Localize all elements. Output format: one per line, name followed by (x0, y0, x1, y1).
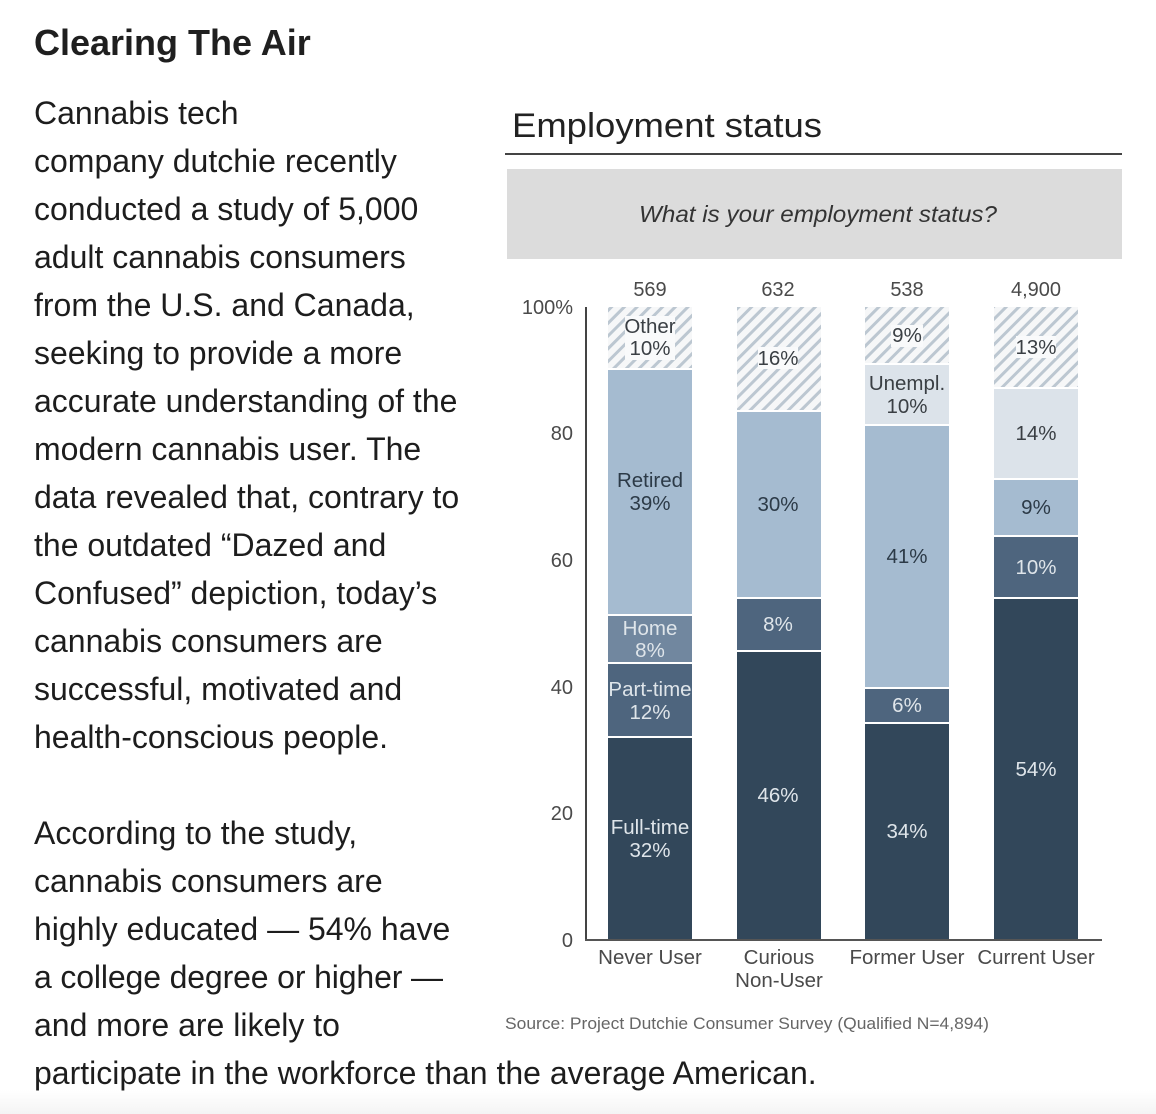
text block: study introduction: modern cannabis user. The (34, 431, 421, 467)
text block: study introduction: conducted a study of 5,000 (34, 191, 418, 227)
bar: Former User: 10% (886, 395, 928, 418)
bar: Current User (994, 279, 1078, 939)
y axis: 60 (551, 550, 573, 572)
bar: Curious Non-User (737, 279, 821, 939)
x axis: Never User (598, 946, 702, 969)
text block: study introduction: company dutchie recently (34, 143, 397, 179)
text block: study introduction: the outdated “Dazed and (34, 527, 386, 563)
text block: study findings: and more are likely to (34, 1007, 340, 1043)
y axis: 80 (551, 423, 573, 445)
text block: study introduction: Cannabis tech (34, 95, 239, 131)
bar: Never User: Full-time (611, 816, 689, 839)
text block: study introduction: Confused” depiction, today’s (34, 575, 437, 611)
bar: Never User: 10% (629, 337, 671, 360)
bar: Curious Non-User: 632 (761, 279, 795, 301)
x axis: Curious (744, 946, 814, 969)
bar: Never User: 569 (633, 279, 667, 301)
bar: Never User: 12% (629, 701, 671, 724)
text block: study introduction: seeking to provide a more (34, 335, 402, 371)
y axis: 100% (522, 297, 573, 319)
bar: Never User: Retired (617, 469, 683, 492)
chart heading: Employment status (512, 107, 822, 145)
text block: study introduction: data revealed that, contrary to (34, 479, 459, 515)
bar: Former User (865, 279, 949, 939)
bar: Current User: 9% (1021, 496, 1051, 519)
bar: Current User: 10% (1015, 556, 1057, 579)
bar: Former User: 9% (892, 324, 922, 347)
text block: study findings: participate in the workforce than the average American. (34, 1055, 817, 1091)
bar: Former User: 41% (886, 545, 928, 568)
y axis: 20 (551, 803, 573, 825)
question banner (507, 169, 1122, 259)
bar: Never User (608, 279, 692, 939)
bar: Current User: 13% (1015, 336, 1057, 359)
heading rule (505, 153, 1122, 155)
text block: study introduction: adult cannabis consumers (34, 239, 406, 275)
bar: Former User: 6% (892, 694, 922, 717)
x axis: Non-User (735, 969, 823, 992)
bar: Never User: 32% (629, 839, 671, 862)
title: Clearing The Air (34, 22, 311, 63)
bar: Current User: 54% (1015, 758, 1057, 781)
bar: Curious Non-User: 46% (757, 784, 799, 807)
text block: study introduction: accurate understanding of the (34, 383, 457, 419)
bar: Never User: 8% (635, 639, 665, 662)
source note: Source: Project Dutchie Consumer Survey (Qualified N=4,894) (505, 1015, 989, 1033)
x axis: Former User (849, 946, 965, 969)
bar: Current User: 4,900 (1011, 279, 1061, 301)
x axis: Current User (977, 946, 1095, 969)
text block: study introduction: cannabis consumers are (34, 623, 383, 659)
text block: study introduction: successful, motivated and (34, 671, 402, 707)
text block: study findings: According to the study, (34, 815, 357, 851)
bar: Curious Non-User: 16% (757, 347, 799, 370)
question banner: What is your employment status? (639, 201, 997, 227)
text block: study findings (34, 815, 817, 1091)
bar: Current User: 14% (1015, 422, 1057, 445)
text block: study findings: highly educated — 54% have (34, 911, 450, 947)
bar: Curious Non-User: 30% (757, 493, 799, 516)
text block: study findings: cannabis consumers are (34, 863, 383, 899)
text block: study introduction: health-conscious people. (34, 719, 388, 755)
bar: Former User: Unempl. (869, 372, 945, 395)
bar: Former User: 34% (886, 820, 928, 843)
text block: study introduction (34, 95, 459, 755)
text block: study introduction: from the U.S. and Canada, (34, 287, 415, 323)
text block: study findings: a college degree or higher — (34, 959, 443, 995)
x axis (585, 939, 1102, 992)
stacked bar chart (522, 279, 1102, 992)
bar: Never User: Part-time (608, 678, 692, 701)
y axis: 0 (562, 930, 573, 952)
y axis: 40 (551, 677, 573, 699)
bar: Never User: Other (624, 315, 676, 338)
y axis (522, 297, 587, 952)
bar: Former User: 538 (890, 279, 924, 301)
bar: Never User: Home (623, 617, 677, 640)
bar: Curious Non-User: 8% (763, 613, 793, 636)
bar: Never User: 39% (629, 492, 671, 515)
